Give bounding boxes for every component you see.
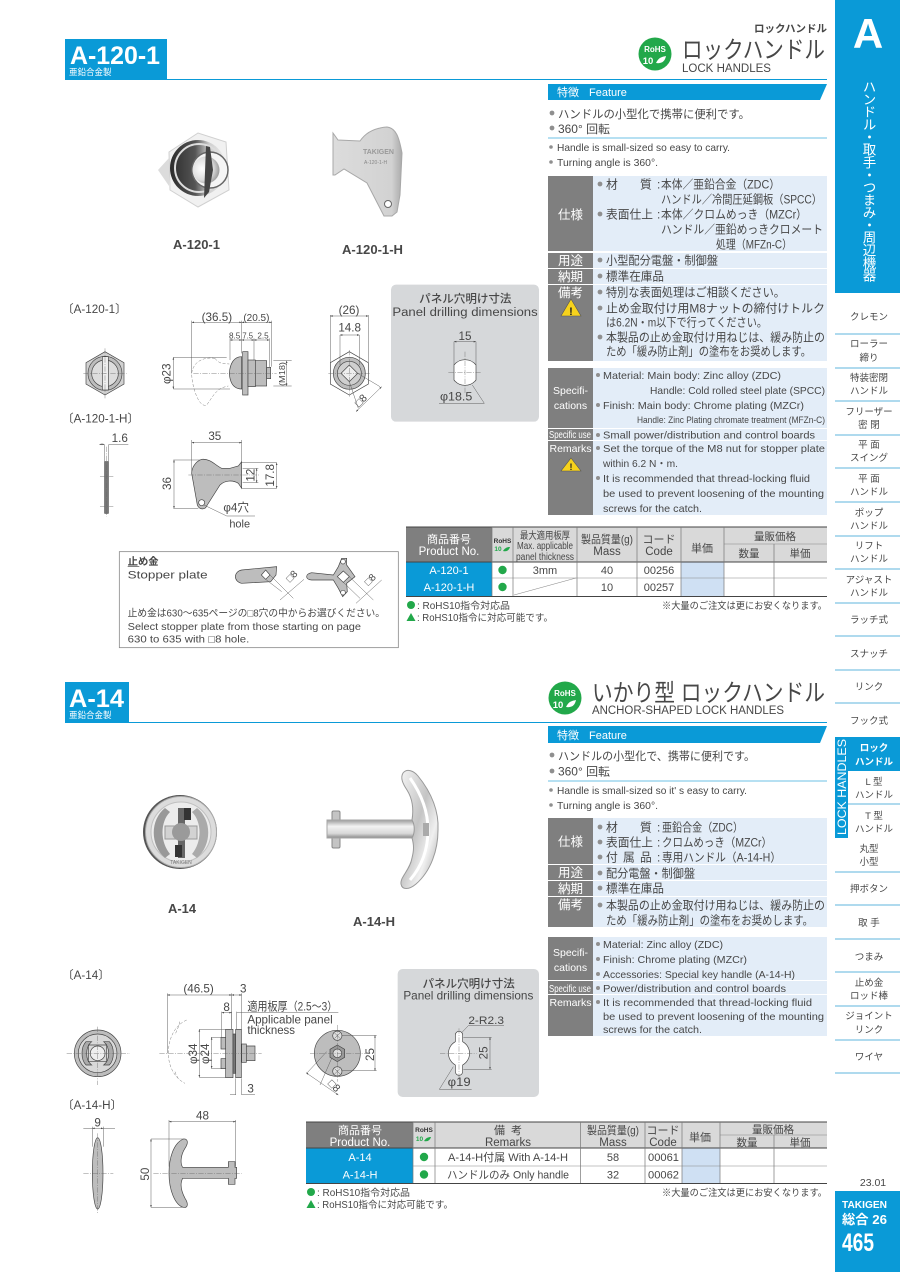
section header: A-120-1: A-120-1 (70, 42, 160, 70)
specification table Japanese A-120-1: 本体／亜鉛合金（ZDC） (661, 178, 780, 192)
drawing: rear view with dimensions: 14.8 (338, 322, 361, 335)
product photo: A-14-H handle: A-14-H (353, 915, 395, 929)
specification table Japanese A-120-1: 材 (606, 178, 618, 192)
specification table Japanese A-120-1: : (657, 208, 660, 222)
drawing: side view with dimensions: (M18) (277, 362, 287, 386)
drawing: side view with dimensions: φ24 (199, 1043, 212, 1064)
specification table English A-120-1: Specifi- (553, 385, 589, 397)
drawing: handle outline with dimensions: 35 (208, 430, 221, 443)
drawing: side view with dimensions: (36.5) (202, 311, 232, 324)
specification table Japanese A-120-1: 本製品の止め金取付け用ねじは、緩み防止の (606, 330, 825, 344)
stock table A-120-1: Code (645, 546, 673, 558)
drawing: handle edge view (83, 1117, 115, 1213)
specification table Japanese A-120-1: 標準在庫品 (606, 270, 664, 284)
panel: drilling dimensions A-120-1 (391, 285, 539, 422)
stock table A-14: 備 考 (494, 1124, 522, 1137)
page number block (835, 1177, 900, 1272)
specification table Japanese A-14: 備考 (558, 898, 583, 912)
stock table A-120-1: 10 (601, 582, 613, 594)
stock table A-14: 単価 (790, 1136, 810, 1149)
drawing: handle outline with dimensions: 36 (161, 477, 174, 490)
callout: stopper plate: 630 to 635 with □8 hole. (128, 635, 249, 646)
drawing: side view with dimensions: 8 (223, 1001, 230, 1014)
icon: RoHS 10 badge (638, 38, 672, 70)
feature list English (549, 785, 747, 812)
panel: drilling dimensions A-120-1: パネル穴明け寸法 (419, 292, 512, 306)
panel: drilling dimensions A-120-1: Panel drilling dimensions (392, 305, 538, 319)
specification table Japanese A-14: 付 (606, 850, 618, 864)
drawing: side view with dimensions: (46.5) (183, 983, 214, 996)
stock table A-14: ハンドルのみ Only handle (447, 1168, 569, 1182)
title: lock handles (638, 23, 827, 75)
sidebar menu items: ロッド棒 (850, 990, 888, 1002)
feature list Japanese: 360° 回転 (558, 766, 611, 778)
icon: RoHS 10 mini badge: 10 (494, 546, 502, 553)
stock table A-120-1: 3mm (533, 565, 557, 577)
drawing: side view with dimensions: 3 (240, 983, 246, 996)
feature bar: 特徴 (557, 85, 579, 99)
specification table Japanese A-14: 表面仕上 (606, 836, 653, 850)
title: lock handles: ロックハンドル (754, 23, 827, 35)
stock table A-120-1: コード (642, 534, 676, 546)
specification table Japanese A-120-1: 特別な表面処理はご相談ください。 (606, 286, 785, 300)
section header: A-14: 亜鉛合金製 (69, 710, 112, 720)
drawing: side view with dimensions: 適用板厚（2.5～3） (247, 1000, 337, 1014)
specification table English A-120-1: Handle: Zinc Plating chromate treatment (MFZn-C) (637, 415, 825, 426)
stock table A-14: Mass (599, 1137, 627, 1149)
stock table A-14: 00061 (648, 1152, 679, 1164)
stock table A-120-1: A-120-1-H (424, 582, 474, 594)
specification table Japanese A-120-1: ハンドル／亜鉛めっきクロメート (661, 222, 823, 236)
drawing: handle outline with dimensions: hole (229, 518, 250, 530)
title: anchor-shaped lock handles: いかり型 ロックハンドル (592, 680, 825, 707)
specification table Japanese A-14: 質 (640, 820, 652, 834)
specification table Japanese A-120-1: 止め金取付け用M8ナットの締付けトルク (606, 302, 825, 316)
product photo: A-120-1-H key: A-120-1-H (364, 160, 387, 166)
stock table A-120-1: 量販価格 (754, 530, 796, 543)
drawing: side view with dimensions: 7.5 (242, 332, 254, 341)
drawing: rear view with dimensions: 25 (364, 1048, 377, 1061)
specification table Japanese A-14: : (657, 820, 660, 834)
sidebar menu items: 小型 (859, 857, 879, 868)
technical drawings A-14: 〔A-14〕 (62, 968, 110, 982)
specification table Japanese A-14: : (657, 836, 660, 850)
sidebar menu items: リンク (855, 1025, 883, 1036)
table footnotes A-14: : RoHS10指令対応品 (317, 1186, 410, 1199)
stock table A-120-1: 00257 (644, 582, 674, 594)
specification table Japanese A-120-1: 表面仕上 (606, 208, 653, 222)
feature bar (548, 84, 827, 100)
stock table A-14: Product No. (330, 1137, 390, 1149)
specification table English A-14: Remarks (549, 997, 592, 1009)
feature list Japanese: ハンドルの小型化で携帯に便利です。 (558, 107, 750, 121)
product photo: A-120-1-H key: A-120-1-H (342, 243, 403, 257)
sidebar menu items: つまみ (855, 952, 883, 963)
specification table Japanese A-120-1: は6.2N・m以下で行ってください。 (606, 316, 767, 330)
drawing: side view with dimensions (159, 983, 338, 1095)
title: lock handles: LOCK HANDLES (682, 63, 771, 75)
sidebar menu items: ワイヤ (855, 1052, 883, 1063)
panel: drilling dimensions A-14: 2-R2.3 (468, 1015, 504, 1027)
specification table Japanese A-120-1: 納期 (558, 269, 583, 284)
sidebar menu items: ハンドル (855, 824, 893, 835)
drawing: side view with dimensions: (20.5) (243, 313, 269, 324)
specification table Japanese A-14: 標準在庫品 (606, 882, 664, 896)
drawing: handle edge view (99, 432, 128, 517)
feature bar: 特徴 (557, 728, 579, 742)
icon: RoHS 10 mini badge (415, 1127, 434, 1143)
stock table A-120-1: 00256 (644, 565, 674, 577)
table footnotes A-120-1 (406, 599, 827, 624)
stock table A-120-1: Product No. (419, 546, 479, 558)
feature list Japanese: ハンドルの小型化で、携帯に便利です。 (558, 749, 755, 763)
specification table Japanese A-14: 亜鉛合金（ZDC） (662, 820, 743, 834)
table footnotes A-120-1: ※大量のご注文は更にお安くなります。 (662, 599, 827, 612)
sidebar top tab: A: ハンドル・取手・つまみ・周辺機器 (860, 80, 876, 282)
page number block: 465 (842, 1229, 874, 1257)
feature bar: Feature (589, 87, 627, 99)
drawing: side view with dimensions: thickness (247, 1024, 295, 1037)
feature list Japanese: 360° 回転 (558, 123, 611, 136)
sidebar active item: lock handles: LOCK HANDLES (837, 739, 849, 835)
drawing: rear view with dimensions: □8 (325, 1078, 342, 1095)
stock table A-120-1: 数量 (738, 547, 760, 560)
stock table A-14: A-14 (348, 1152, 372, 1164)
sidebar menu items: ハンドル (855, 790, 893, 801)
sidebar menu items: ハンドル (850, 487, 888, 498)
icon: warning triangle (561, 458, 581, 472)
technical drawings A-120-1: 〔A-120-1〕 (62, 302, 127, 316)
specification table Japanese A-14: : (657, 850, 660, 864)
feature panel A-120-1 (548, 84, 827, 169)
specification table Japanese A-120-1 (548, 176, 827, 361)
specification table English A-120-1: within 6.2 N・m. (602, 458, 678, 470)
sidebar menu items: 平 面 (858, 474, 880, 485)
specification table Japanese A-14 (548, 818, 827, 928)
specification table English A-14: be used to prevent loosening of the mounting (603, 1011, 824, 1023)
feature list English (549, 142, 730, 169)
drawing: rear view with dimensions (306, 1025, 377, 1095)
sidebar menu items: ラッチ式 (850, 614, 888, 626)
specification table Japanese A-120-1: 小型配分電盤・制御盤 (606, 254, 718, 268)
product photo: A-120-1-H key (333, 127, 403, 257)
specification table English A-14: screws for the catch. (603, 1024, 702, 1036)
title: anchor-shaped lock handles: ANCHOR-SHAPED LOCK HANDLES (592, 705, 784, 717)
stock table A-14 (306, 1122, 827, 1184)
specification table Japanese A-120-1: 用途 (558, 254, 583, 268)
callout: stopper plate: 止め金 (128, 555, 159, 568)
specification table English A-120-1: Material: Main body: Zinc alloy (ZDC) (603, 370, 781, 382)
callout: stopper plate: □8 (363, 572, 379, 588)
drawing: handle outline with dimensions: 48 (196, 1109, 209, 1122)
icon: RoHS 10 badge: 10 (643, 56, 653, 67)
sidebar menu items: ハンドル (850, 521, 888, 532)
sidebar menu items: ローラー (850, 339, 888, 350)
stock table A-120-1 (406, 527, 827, 596)
page number block: 23.01 (860, 1177, 886, 1189)
sidebar top tab: A: A (853, 10, 883, 57)
specification table English A-120-1: Set the torque of the M8 nut for stopper plate (603, 443, 825, 455)
page number block: 総合 26 (842, 1212, 887, 1227)
sidebar menu items: 密 閉 (858, 419, 880, 431)
icon: RoHS 10 mini badge: 10 (416, 1136, 423, 1143)
stock table A-14: 単価 (689, 1130, 711, 1144)
sidebar menu items: フック式 (850, 715, 888, 727)
icon: RoHS 10 badge: RoHS (554, 689, 577, 698)
stock table A-14: A-14-H (343, 1170, 377, 1182)
specification table Japanese A-120-1: ハンドル／冷間圧延鋼板（SPCC） (661, 192, 822, 206)
section header: A-14: A-14 (69, 685, 124, 713)
table footnotes A-14: : RoHS10指令に対応可能です。 (317, 1198, 453, 1211)
panel: drilling dimensions A-120-1: φ18.5 (440, 391, 472, 404)
sidebar menu items: 丸型 (859, 843, 879, 855)
stock table A-120-1: panel thickness (516, 552, 574, 563)
product photo: A-14 lock (143, 795, 217, 916)
specification table Japanese A-120-1: 処理（MFZn-C） (716, 238, 792, 252)
table footnotes A-120-1: : RoHS10指令に対応可能です。 (417, 611, 553, 624)
drawing: side view with dimensions: 3 (247, 1082, 254, 1095)
drawing: handle outline with dimensions: 17.8 (264, 464, 277, 487)
callout: stopper plate (119, 552, 398, 648)
specification table Japanese A-14: 配分電盤・制御盤 (606, 866, 695, 880)
drawing: front view (67, 1027, 130, 1085)
sidebar active item: lock handles: ロック (860, 743, 888, 754)
drawing: handle outline with dimensions: φ4穴 (223, 502, 249, 515)
drawing: side view with dimensions: φ34 (187, 1043, 200, 1064)
stock table A-14: 32 (607, 1170, 619, 1182)
panel: drilling dimensions A-14 (398, 969, 539, 1097)
stock table A-120-1: Mass (593, 546, 621, 558)
specification table Japanese A-120-1: 質 (640, 178, 652, 192)
sidebar menu items: ジョイント (845, 1011, 893, 1022)
specification table English A-14: Finish: Chrome plating (MZCr) (603, 954, 747, 966)
stock table A-14: コード (646, 1125, 680, 1137)
specification table Japanese A-120-1: ため「緩み防止剤」の塗布をお奨めします。 (606, 344, 811, 358)
stock table A-120-1: 最大適用板厚 (520, 529, 570, 542)
specification table English A-14: Material: Zinc alloy (ZDC) (603, 939, 723, 951)
sidebar menu items: 特装密閉 (850, 372, 888, 384)
specification table English A-120-1: be used to prevent loosening of the mounting (603, 488, 824, 500)
feature panel A-14 (548, 726, 827, 812)
section header: A-120-1 (65, 39, 827, 80)
panel: drilling dimensions A-14: φ19 (448, 1076, 471, 1089)
stock table A-14: 00062 (648, 1170, 679, 1182)
sidebar menu items: T 型 (865, 811, 883, 822)
specification table English A-14: Power/distribution and control boards (603, 983, 786, 995)
specification table Japanese A-120-1: 備考 (558, 286, 583, 300)
stock table A-120-1: 商品番号 (427, 533, 471, 546)
drawing: side view with dimensions: 8.5 (229, 332, 241, 341)
sidebar active item: lock handles (835, 737, 900, 838)
sidebar menu items: 取 手 (858, 917, 880, 929)
product photo: A-120-1 lock: A-120-1 (173, 238, 220, 252)
specification table English A-120-1: Small power/distribution and control boards (603, 430, 815, 442)
sidebar menu items: 平 面 (858, 440, 880, 451)
sidebar menu items (835, 312, 900, 1073)
product photo: A-120-1 lock (158, 133, 229, 252)
stock table A-14: 58 (607, 1152, 619, 1164)
sidebar menu items: 止め金 (855, 977, 884, 989)
feature list English: Turning angle is 360°. (557, 157, 658, 169)
drawing: handle outline with dimensions: 50 (139, 1167, 152, 1181)
sidebar menu items: 締り (859, 352, 879, 364)
table footnotes A-14: ※大量のご注文は更にお安くなります。 (662, 1186, 827, 1199)
sidebar menu items: アジャスト (846, 575, 892, 586)
sidebar menu items: ポップ (855, 508, 884, 519)
drawing: handle edge view: 1.6 (112, 432, 128, 445)
specification table English A-120-1: It is recommended that thread-locking fluid (603, 473, 810, 485)
sidebar menu items: ハンドル (850, 588, 888, 599)
stock table A-14: Remarks (485, 1137, 531, 1149)
panel: drilling dimensions A-14: 25 (477, 1046, 490, 1059)
table footnotes A-14 (306, 1186, 827, 1211)
stock table A-14: 量販価格 (752, 1123, 794, 1136)
specification table Japanese A-120-1: 仕様 (558, 207, 583, 222)
stock table A-14: 製品質量(g) (587, 1123, 639, 1137)
specification table Japanese A-14: ため「緩み防止剤」の塗布をお奨めします。 (606, 914, 813, 928)
section header: A-14 (65, 682, 827, 722)
stock table A-120-1: 単価 (691, 541, 713, 555)
specification table English A-120-1: screws for the catch. (603, 503, 702, 515)
feature list Japanese (548, 749, 827, 781)
sidebar menu items: クレモン (850, 312, 888, 323)
feature list English: Handle is small-sized so it' s easy to carry. (557, 785, 747, 797)
icon: warning triangle: ! (569, 306, 573, 318)
drawing: rear view with dimensions: (26) (339, 304, 360, 317)
stock table A-14: 数量 (736, 1136, 758, 1149)
page number block: TAKIGEN (842, 1199, 887, 1211)
callout: stopper plate: 止め金は630～635ページの□8穴の中からお選びください。 (128, 607, 385, 620)
stock table A-14: 商品番号 (338, 1124, 382, 1137)
feature list Japanese (548, 107, 827, 138)
drawing: handle outline with dimensions (139, 1109, 242, 1207)
stock table A-120-1: 製品質量(g) (581, 532, 633, 546)
specification table English A-120-1: Specific use (549, 430, 591, 441)
sidebar menu items: ハンドル (850, 554, 888, 565)
sidebar menu items: ハンドル (850, 386, 888, 397)
section header: A-120-1: 亜鉛合金製 (69, 67, 112, 77)
stock table A-120-1: Max. applicable (517, 541, 573, 552)
drawing: side view with dimensions: 2.5 (257, 332, 269, 341)
specification table English A-14 (548, 937, 827, 1036)
stock table A-120-1: A-120-1 (429, 565, 469, 577)
icon: RoHS 10 mini badge (494, 538, 512, 553)
stock table A-120-1: 40 (601, 565, 613, 577)
specification table Japanese A-14: 仕様 (558, 834, 583, 849)
sidebar menu items: フリーザー (845, 407, 893, 418)
drawing: rear view with dimensions (328, 304, 382, 412)
stock table A-14: A-14-H付属 With A-14-H (448, 1151, 568, 1164)
feature bar: Feature (589, 730, 627, 742)
specification table English A-120-1 (548, 368, 827, 515)
panel: drilling dimensions A-14: パネル穴明け寸法 (422, 976, 515, 990)
callout: stopper plate: Select stopper plate from those starting on page (128, 622, 361, 633)
icon: RoHS 10 badge: 10 (553, 700, 563, 711)
icon: RoHS 10 badge: RoHS (644, 45, 667, 54)
technical drawings A-120-1: 〔A-120-1-H〕 (62, 411, 139, 425)
title: lock handles: ロックハンドル (682, 37, 825, 64)
panel: drilling dimensions A-120-1: 15 (459, 330, 471, 343)
icon: warning triangle (561, 299, 581, 318)
feature bar (548, 726, 827, 743)
drawing: side view with dimensions (161, 311, 292, 405)
icon: warning triangle: ! (570, 462, 572, 472)
specification table Japanese A-14: クロムめっき（MZCr） (662, 836, 772, 850)
icon: RoHS 10 mini badge: RoHS (494, 538, 512, 545)
product photo: A-120-1-H key: TAKIGEN (363, 149, 394, 156)
drawing: handle outline with dimensions: 12 (245, 469, 258, 482)
panel: drilling dimensions A-14: Panel drilling dimensions (403, 989, 534, 1002)
specification table English A-14: Specific use (549, 984, 591, 995)
title: anchor-shaped lock handles (548, 680, 825, 717)
specification table English A-120-1: Handle: Cold rolled steel plate (SPCC) (650, 385, 825, 397)
icon: RoHS 10 mini badge: RoHS (415, 1127, 434, 1134)
drawing: side view with dimensions: φ23 (161, 363, 174, 384)
specification table Japanese A-14: 品 (640, 850, 652, 864)
specification table Japanese A-14: 用途 (558, 866, 583, 880)
sidebar menu items: リフト (855, 541, 883, 552)
specification table English A-120-1: cations (554, 400, 587, 412)
feature list English: Turning angle is 360°. (557, 800, 658, 812)
sidebar menu items: スナッチ (850, 649, 888, 660)
drawing: handle outline with dimensions (161, 430, 277, 530)
sidebar active item: lock handles: ハンドル (855, 757, 893, 768)
drawing: front view (83, 348, 127, 398)
product photo: A-14 lock: TAKIGEN (170, 860, 192, 866)
specification table Japanese A-14: 材 (606, 820, 618, 834)
technical drawings A-120-1 (62, 302, 398, 648)
sidebar menu items: スイング (850, 452, 888, 464)
specification table Japanese A-14: 本製品の止め金取付け用ねじは、緩み防止の (606, 898, 825, 912)
sidebar top tab: A (835, 0, 900, 293)
drawing: side view with dimensions: Applicable panel (247, 1013, 333, 1026)
product photo: A-14-H handle (327, 770, 438, 929)
specification table English A-14: It is recommended that thread-locking fluid (603, 997, 812, 1009)
specification table English A-120-1: Remarks (549, 443, 592, 455)
callout: stopper plate: Stopper plate (128, 569, 208, 581)
sidebar menu items: 押ボタン (850, 883, 888, 895)
table footnotes A-120-1: : RoHS10指令対応品 (417, 599, 510, 612)
specification table English A-14: cations (554, 962, 587, 974)
specification table Japanese A-14: 属 (623, 850, 635, 864)
sidebar menu items: L 型 (865, 777, 883, 788)
feature list English: Handle is small-sized so easy to carry. (557, 142, 730, 154)
stock table A-120-1: 単価 (790, 547, 810, 560)
callout: stopper plate: □8 (284, 568, 301, 585)
specification table English A-14: Specifi- (553, 947, 589, 959)
specification table English A-120-1: Finish: Main body: Chrome plating (MZCr) (603, 400, 804, 412)
sidebar: category navigation (835, 0, 900, 1272)
specification table Japanese A-120-1: 本体／クロムめっき（MZCr） (661, 208, 807, 222)
technical drawings A-14 (62, 968, 377, 1213)
icon: RoHS 10 badge (548, 682, 582, 714)
specification table Japanese A-120-1: : (657, 178, 660, 192)
specification table Japanese A-14: 専用ハンドル（A-14-H） (662, 850, 781, 864)
sidebar menu items: リンク (855, 682, 883, 693)
specification table English A-14: Accessories: Special key handle (A-14-H) (603, 969, 795, 981)
product photo: A-14 lock: A-14 (168, 902, 196, 916)
technical drawings A-14: 〔A-14-H〕 (62, 1098, 122, 1112)
stock table A-14: Code (649, 1137, 677, 1149)
specification table Japanese A-14: 納期 (558, 881, 583, 896)
drawing: handle edge view: 9 (94, 1117, 101, 1130)
drawing: rear view with dimensions: □8 (353, 392, 370, 409)
